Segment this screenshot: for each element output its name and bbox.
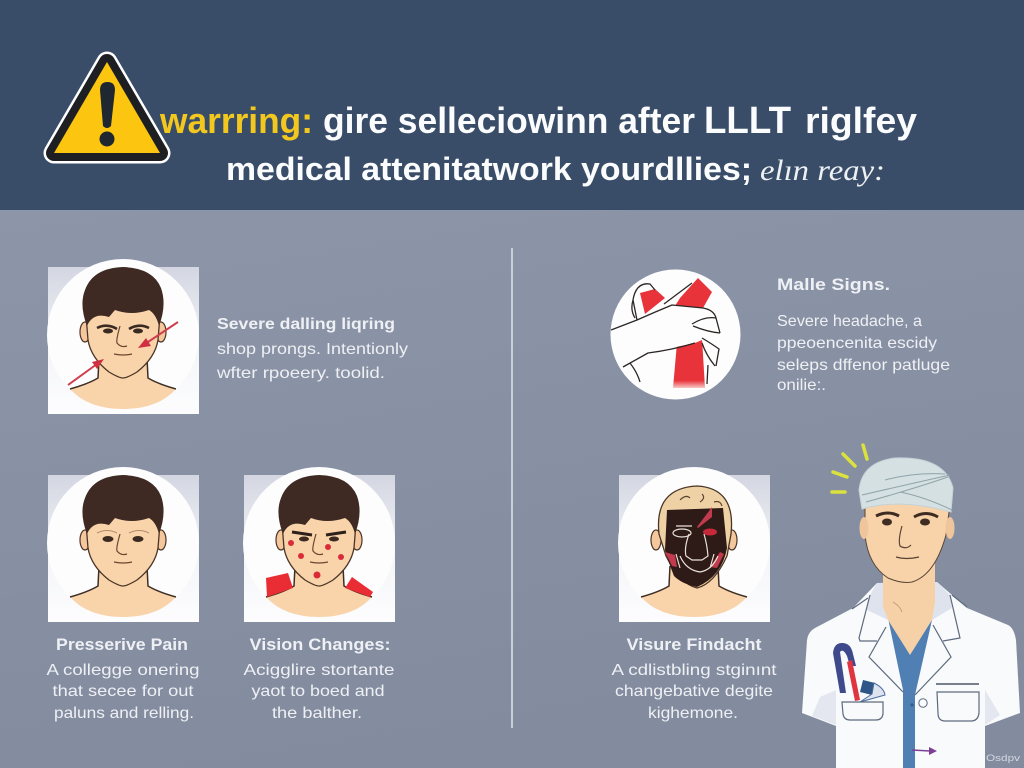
text: presserive pain caption: paluns and relling. — [54, 705, 194, 722]
arrow on coat — [912, 750, 930, 751]
icon: warning triangle — [54, 62, 160, 153]
text: malle signs description: onilie:. — [777, 377, 826, 394]
panel: visure findacht — [612, 467, 777, 722]
neck — [883, 560, 935, 655]
scrubs — [888, 618, 932, 768]
head bandage — [859, 458, 953, 512]
text: presserive pain caption — [46, 635, 200, 722]
body background — [0, 210, 1024, 768]
text: severe pain description: Severe dalling liqring — [217, 316, 395, 333]
doctor illustration — [802, 445, 1020, 768]
text: visure findacht caption — [612, 635, 777, 722]
text: malle signs description: Severe headache, a — [777, 313, 922, 330]
icon: face with red spots — [243, 467, 395, 622]
panel: vision changes — [243, 467, 395, 722]
divider — [511, 248, 513, 728]
icon: hand gripping red band — [610, 270, 740, 400]
text: visure findacht caption: kighemone. — [648, 705, 738, 722]
text: vision changes caption: yaot to boed and — [252, 683, 384, 700]
text: presserive pain caption: that secee for out — [52, 683, 194, 700]
title: elın reay: — [760, 154, 885, 187]
text: visure findacht caption: Visure Findacht — [626, 635, 762, 654]
title: gire selleciowinn after — [323, 100, 695, 141]
title: warrring: — [159, 100, 313, 141]
text: presserive pain caption: A collegge onering — [46, 662, 200, 679]
text: vision changes caption: Vision Changes: — [250, 635, 390, 654]
watermark: Osdpv — [986, 753, 1021, 763]
text: vision changes caption — [244, 635, 395, 722]
head — [865, 500, 950, 582]
panel: presserive pain — [46, 467, 200, 722]
icon: dark mask face — [618, 467, 770, 622]
text: vision changes caption: the balther. — [272, 705, 362, 722]
icon: neutral face — [47, 467, 199, 622]
text: presserive pain caption: Presserive Pain — [56, 635, 188, 654]
coat pockets and button — [842, 692, 979, 721]
collar shading — [867, 582, 952, 620]
lab coat — [802, 582, 1020, 768]
text: severe pain description — [216, 316, 408, 382]
panel: severe pain face — [47, 259, 408, 414]
text: malle signs description: Malle Signs. — [777, 275, 890, 294]
icon: yellow pain lines — [832, 445, 867, 492]
icon: face with red arrows — [47, 259, 199, 414]
text: malle signs description: seleps dffenor patluge — [777, 357, 950, 374]
text: malle signs description: ppeoencenita escidy — [777, 335, 937, 352]
title: riglfey — [805, 100, 917, 141]
header band — [0, 0, 1024, 210]
collars and lapels — [852, 595, 967, 695]
pens in pocket — [833, 643, 856, 693]
text: visure findacht caption: changebative degite — [615, 683, 773, 700]
sleeve shading — [812, 690, 1000, 725]
text: malle signs description — [777, 275, 950, 394]
text: severe pain description: wfter rpoeery. toolid. — [216, 365, 385, 382]
title: medical attenitatwork yourdllies; — [226, 151, 752, 187]
title: LLLT — [704, 100, 791, 142]
title — [159, 100, 917, 187]
text: severe pain description: shop prongs. Intentionly — [217, 341, 408, 358]
panel: malle signs — [610, 270, 950, 400]
text: visure findacht caption: A cdlistbling stginınt — [612, 662, 777, 679]
text: vision changes caption: Acigglire stortante — [244, 662, 395, 679]
